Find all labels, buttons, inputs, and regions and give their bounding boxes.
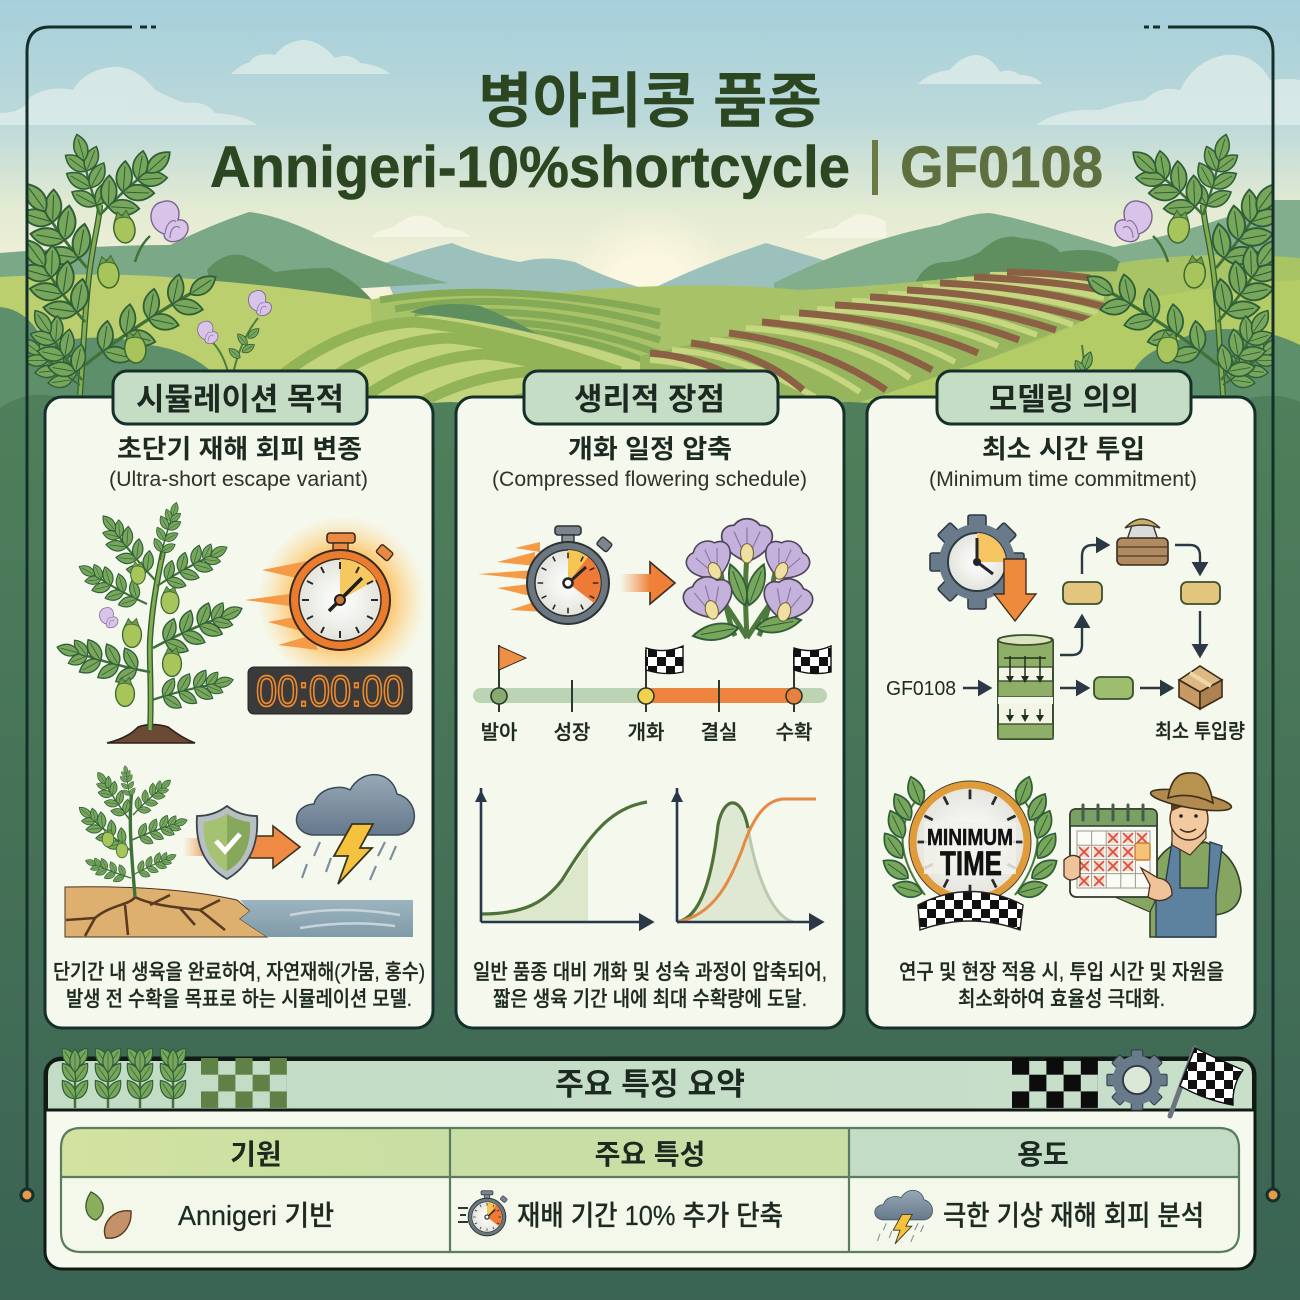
icon: orange stopwatch bbox=[245, 516, 426, 684]
icon: checkered flag bbox=[1170, 1048, 1243, 1116]
timeline labels: 성장 bbox=[554, 721, 590, 744]
description: 짧은 생육 기간 내에 최대 수확량에 도달. bbox=[493, 988, 807, 1011]
storage cylinder bbox=[998, 635, 1053, 739]
timeline bbox=[473, 645, 831, 744]
timeline labels bbox=[481, 721, 812, 744]
title bbox=[210, 68, 1103, 200]
description bbox=[53, 961, 425, 1011]
heading: 최소 시간 투입 bbox=[982, 434, 1145, 464]
calendar bbox=[1070, 805, 1157, 897]
plant: right chickpea bbox=[1086, 134, 1272, 396]
icon: flower bouquet bbox=[679, 519, 817, 644]
tab heading bbox=[113, 371, 367, 424]
icon: small storm cloud bbox=[875, 1190, 933, 1244]
icon: gear bbox=[1107, 1050, 1167, 1110]
title: variety name: Annigeri-10%shortcycle bbox=[210, 135, 850, 200]
timeline labels: 수확 bbox=[776, 721, 812, 744]
flag: harvest bbox=[794, 646, 831, 674]
arrow bbox=[620, 562, 675, 604]
column head: origin: 기원 bbox=[230, 1139, 282, 1170]
icon: plant on cracked earth bbox=[65, 764, 413, 937]
title: Korean: 병아리콩 품종 bbox=[478, 68, 822, 135]
process boxes bbox=[1063, 582, 1102, 604]
timeline labels: 개화 bbox=[628, 721, 664, 744]
laurel wreath bbox=[879, 774, 1061, 900]
panel: key features summary bbox=[45, 1045, 1255, 1269]
cell: key traits: 재배 기간 10% 추가 단축 bbox=[517, 1200, 783, 1231]
green checker bbox=[201, 1058, 287, 1108]
summary table bbox=[61, 1128, 1239, 1252]
summary title: 주요 특징 요약 bbox=[555, 1067, 745, 1102]
min input label: 최소 투입량 bbox=[1155, 720, 1245, 743]
panel: modeling significance bbox=[867, 371, 1255, 1028]
tab heading bbox=[937, 371, 1191, 424]
icon: shield and arrow bbox=[183, 806, 300, 879]
summary header bar bbox=[46, 1060, 1254, 1110]
GF0108 label: GF0108 bbox=[886, 678, 956, 700]
arrows bbox=[963, 545, 1200, 688]
checker ribbon bbox=[918, 892, 1023, 930]
subheading: (Minimum time commitment) bbox=[929, 468, 1197, 491]
lower green background bbox=[0, 412, 1300, 1300]
small bud on the right bbox=[1072, 345, 1095, 390]
icon: chickpea plant bbox=[51, 498, 250, 743]
plant: left chickpea bbox=[28, 134, 216, 396]
subheading: (Compressed flowering schedule) bbox=[492, 468, 807, 491]
subheading: (Ultra-short escape variant) bbox=[109, 468, 368, 491]
process box bbox=[1094, 677, 1133, 699]
small flowers on the left bbox=[198, 290, 271, 378]
badge text: TIME bbox=[940, 845, 1002, 883]
description bbox=[899, 961, 1224, 1011]
heading: 초단기 재해 회피 변종 bbox=[117, 434, 362, 464]
icon: gear clock with down arrow bbox=[930, 515, 1036, 621]
process box bbox=[1181, 582, 1220, 604]
digital timer: 00:00:00 bbox=[256, 667, 404, 716]
timeline labels: 발아 bbox=[481, 721, 517, 744]
description: 최소화하여 효율성 극대화. bbox=[958, 988, 1165, 1011]
sky background bbox=[0, 0, 1300, 300]
black checker bbox=[1012, 1058, 1098, 1108]
icon: small stopwatch bbox=[458, 1191, 508, 1236]
description bbox=[473, 961, 827, 1011]
timeline labels: 결실 bbox=[701, 721, 737, 744]
icon: gray stopwatch bbox=[478, 526, 613, 624]
tree line bbox=[0, 395, 1300, 440]
icon: farmer with calendar bbox=[1064, 773, 1241, 937]
description: 단기간 내 생육을 완료하여, 자연재해(가뭄, 홍수) bbox=[53, 961, 425, 984]
flow diagram bbox=[963, 519, 1245, 743]
column head: key traits: 주요 특성 bbox=[595, 1139, 705, 1170]
flag: start bbox=[499, 646, 526, 670]
icon: leaf and seed bbox=[86, 1192, 131, 1238]
column head: use: 용도 bbox=[1017, 1139, 1069, 1170]
panel: simulation purpose bbox=[45, 371, 433, 1028]
badge: minimum time bbox=[879, 774, 1061, 930]
badge text: MINIMUM bbox=[927, 824, 1013, 850]
title divider bbox=[872, 140, 878, 195]
description: 발생 전 수확을 목표로 하는 시뮬레이션 모델. bbox=[66, 988, 412, 1011]
clouds bbox=[0, 40, 1300, 238]
description: 일반 품종 대비 개화 및 성숙 과정이 압축되어, bbox=[473, 961, 827, 984]
mountains bbox=[380, 243, 830, 310]
flag: flowering bbox=[646, 646, 683, 674]
farm fields bbox=[0, 274, 700, 420]
cell: origin: Annigeri 기반 bbox=[178, 1200, 334, 1231]
icon: basket bbox=[1117, 519, 1168, 565]
tab heading bbox=[524, 371, 778, 424]
tab heading: 시뮬레이션 목적 bbox=[136, 382, 344, 417]
tab heading: 모델링 의의 bbox=[989, 382, 1139, 417]
title: code: GF0108 bbox=[900, 135, 1103, 200]
cell: use: 극한 기상 재해 회피 분석 bbox=[943, 1200, 1204, 1231]
landscape scene bbox=[0, 40, 1300, 440]
chart: growth curve bbox=[475, 788, 652, 922]
description: 연구 및 현장 적용 시, 투입 시간 및 자원을 bbox=[899, 961, 1224, 984]
tab heading: 생리적 장점 bbox=[574, 382, 725, 417]
panel: physiological advantages bbox=[456, 371, 844, 1028]
heading: 개화 일정 압축 bbox=[568, 434, 732, 464]
icon: wheat row bbox=[58, 1045, 190, 1108]
icon: cardboard box bbox=[1179, 666, 1222, 709]
chart: compressed bell and S curve bbox=[671, 788, 822, 922]
icon: storm cloud bbox=[296, 775, 414, 884]
